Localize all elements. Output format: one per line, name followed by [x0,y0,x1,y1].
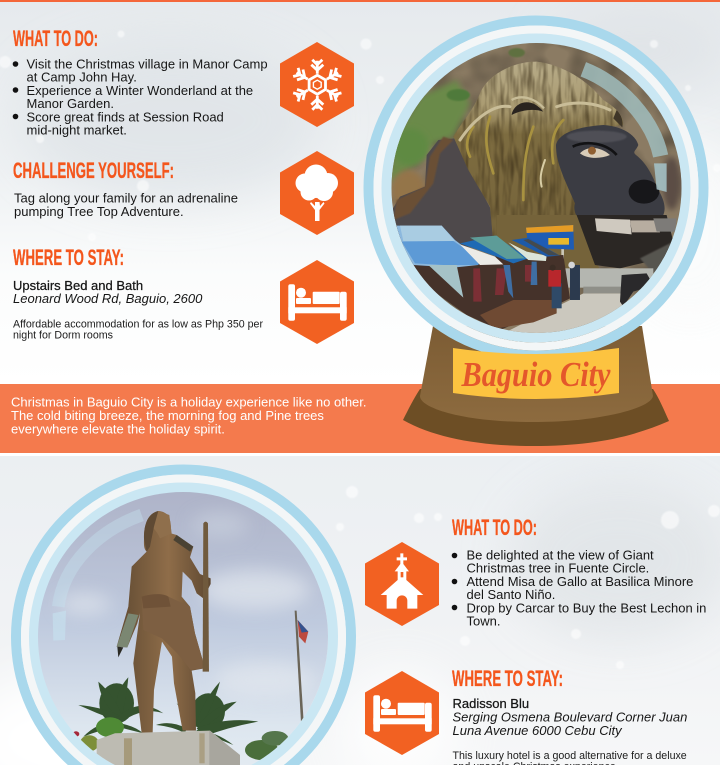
section background: Baguio [0,2,720,252]
section background: Cebu [0,456,720,765]
list: Cebu activities: Town. [466,614,500,628]
shrubs [96,717,124,737]
list: Baguio activities: at Camp John Hay. [26,70,137,85]
heading: challenge yourself: CHALLENGE YOURSELF: [13,158,174,183]
lower rock and wall [497,215,600,270]
top accent bar [0,0,720,2]
photo: Lapu-Lapu statue [36,490,332,765]
icon: tree hexagon [280,151,354,235]
icon: church hexagon [365,542,439,626]
text: challenge description: Tag along your family for an adrenaline [14,190,238,206]
list: Cebu activities: del Santo Niño. [466,587,555,602]
band: Baguio description: Christmas in Baguio City is a holiday experience like no other. [11,394,367,410]
roofs [397,226,480,268]
band: Baguio description: everywhere elevate the holiday spirit. [11,422,225,436]
mane [453,62,623,243]
pedestal [97,731,240,765]
heading: where to stay (Baguio): WHERE TO STAY: [13,245,124,270]
text: challenge description [14,190,238,219]
base label [453,348,619,399]
text: challenge description: pumping Tree Top Adventure. [14,204,184,219]
globe rings [16,470,351,765]
text: Baguio accommodation: Affordable accommodation for as low as Php 350 per [13,318,263,330]
glass glare [583,69,661,156]
list: Cebu activities: Be delighted at the view of Giant [466,548,654,562]
text: Cebu accommodation [452,696,687,765]
lion face [556,125,665,216]
snow globe: Cebu [16,470,351,765]
base label: Baguio City [461,355,611,394]
sign [561,249,564,259]
snow globe: Baguio City [368,20,704,446]
icon: snowflake hexagon [280,42,354,127]
list: Cebu activities [452,548,706,628]
text: Cebu accommodation: This luxury hotel is a good alternative for a deluxe [452,750,687,762]
list: Baguio activities: Experience a Winter Wonderland at the [26,83,253,98]
globe rings [368,20,704,356]
heading: what to do (Cebu): WHAT TO DO: [452,515,537,540]
palm: left [78,677,163,737]
text: Cebu accommodation: Serging Osmena Boulevard Corner Juan [452,710,687,724]
list: Cebu activities: Christmas tree in Fuente Circle. [466,561,649,576]
person and motorbike [552,283,562,308]
dark rock [390,138,497,247]
heading: what to do (Baguio): WHAT TO DO: [13,26,98,51]
text: Baguio accommodation [13,278,263,342]
stall goods [410,255,570,330]
text: Baguio accommodation: night for Dorm rooms [13,330,113,342]
greenery [390,80,470,183]
text: Baguio accommodation: Leonard Wood Rd, Baguio, 2600 [13,291,203,306]
icon: bed hexagon (Baguio) [280,260,354,344]
flag [295,611,304,722]
list: Cebu activities: Drop by Carcar to Buy the Best Lechon in [466,600,706,616]
list: Baguio activities: mid-night market. [26,122,127,138]
globe base [403,326,669,446]
statue [117,511,211,733]
icon: bed hexagon (Cebu) [365,671,439,755]
palm: right [156,682,258,745]
list: Baguio activities: Manor Garden. [26,96,114,111]
text: Cebu accommodation: Radisson Blu [452,696,529,711]
list: Baguio activities: Score great finds at Session Road [26,110,224,124]
text: Cebu accommodation: Luna Avenue 6000 Cebu City [452,723,623,738]
band: Baguio description: The cold biting breeze, the morning fog and Pine trees [11,408,324,423]
text: Baguio accommodation: Upstairs Bed and Bath [13,278,143,293]
glare [58,515,142,607]
list: Cebu activities: Attend Misa de Gallo at Basilica Minore [466,574,693,589]
photo: lion head [390,40,685,342]
heading: where to stay (Cebu): WHERE TO STAY: [452,666,563,691]
list: Baguio activities: Visit the Christmas village in Manor Camp [26,56,268,72]
band: Baguio description [0,384,720,453]
list: Baguio activities [13,56,268,138]
